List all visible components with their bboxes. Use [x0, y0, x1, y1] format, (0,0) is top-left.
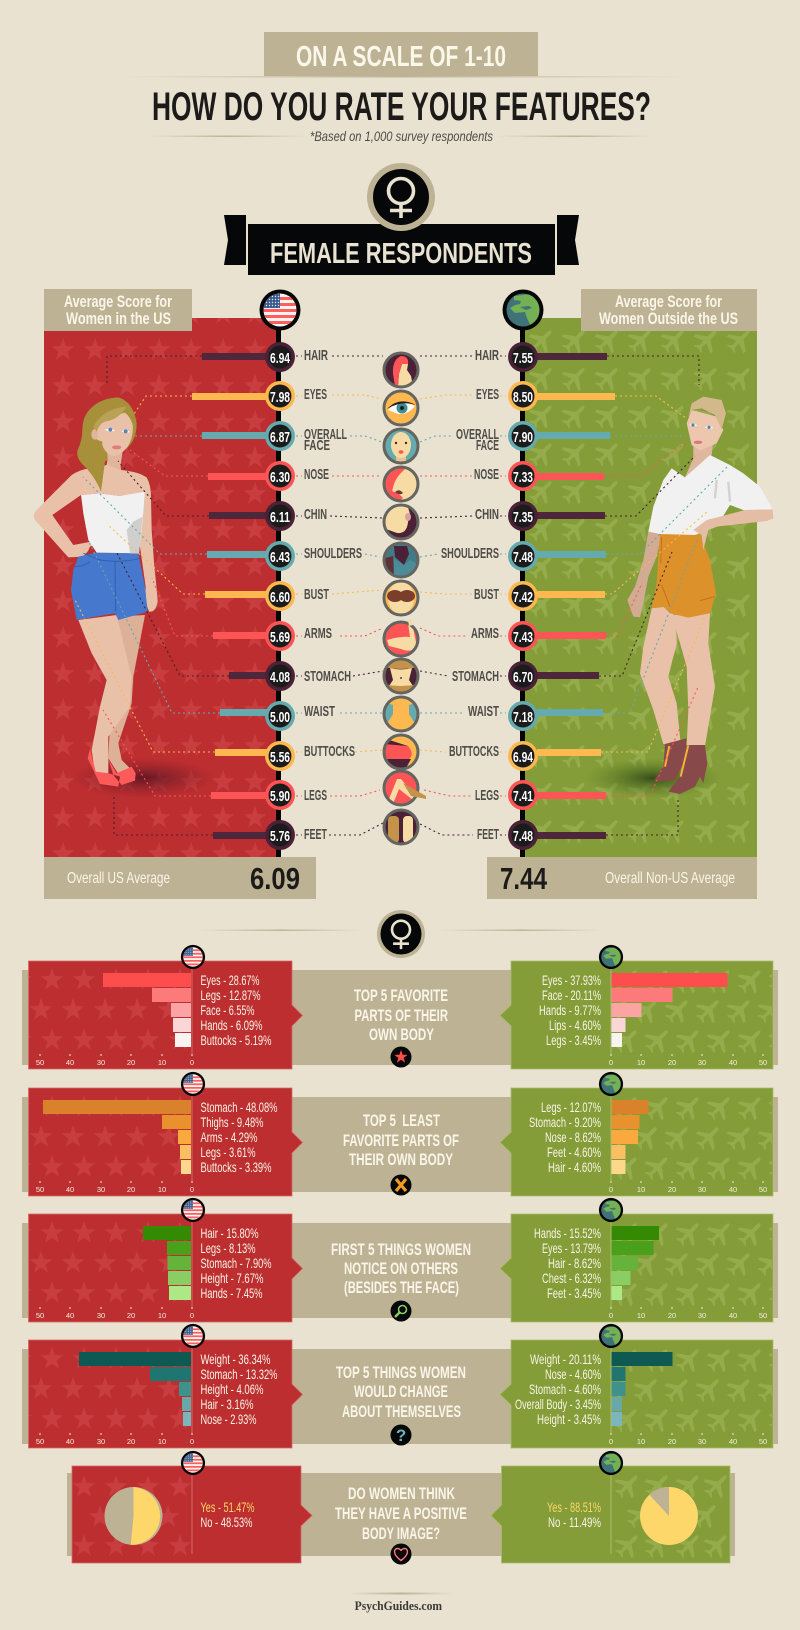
shorts — [652, 534, 716, 618]
panel: US chart: Legs - 8.13% — [200, 1240, 256, 1256]
score badges: US: 6.11 — [270, 509, 290, 526]
row heading: WOULD CHANGE — [354, 1382, 448, 1401]
panel: non-US chart: Legs - 12.07% — [541, 1099, 601, 1115]
panel: non-US chart: Feet - 3.45% — [547, 1285, 601, 1301]
shoes — [88, 749, 136, 787]
hair — [688, 397, 726, 429]
score badges: US: 5.69 — [270, 629, 290, 646]
row heading: THEIR OWN BODY — [349, 1150, 453, 1169]
eyes — [689, 424, 713, 429]
score badges: US: 6.30 — [270, 469, 290, 486]
row heading — [331, 1240, 471, 1297]
score badges: US: 6.94 — [270, 350, 290, 367]
row heading: PARTS OF THEIR — [354, 1006, 448, 1025]
row band — [67, 1473, 735, 1556]
panel: non-US chart — [500, 945, 773, 1069]
panel: non-US pie — [491, 1451, 735, 1563]
panel: non-US pie: Yes - 88.51% — [547, 1499, 601, 1515]
panel: non-US chart: Nose - 8.62% — [545, 1129, 601, 1145]
bars: US scores — [192, 353, 267, 839]
neck — [107, 447, 123, 470]
panel: non-US chart: Height - 3.45% — [537, 1411, 601, 1427]
panel: US chart — [28, 945, 302, 1069]
connector lines: centre — [296, 356, 506, 835]
feature labels: left column — [304, 347, 362, 843]
feature labels: right column: FEET — [477, 826, 499, 843]
icon: magnifier — [390, 1300, 412, 1322]
feature labels: right column: STOMACH — [452, 668, 499, 685]
panel: US chart: 40 — [66, 1185, 74, 1194]
panel: US chart: 20 — [127, 1058, 135, 1067]
panel: US chart: Face - 6.55% — [200, 1002, 254, 1018]
row heading: FAVORITE PARTS OF — [343, 1131, 459, 1150]
banner tails — [224, 215, 579, 265]
feature labels: left column: LEGS — [304, 787, 327, 804]
feature labels: right column: BUST — [474, 586, 499, 603]
panel: non-US chart: 40 — [729, 1185, 737, 1194]
panel: non-US chart: 50 — [759, 1058, 767, 1067]
icon: female divider — [377, 910, 425, 958]
icon: overall face — [383, 428, 419, 464]
score badges: US: 5.00 — [270, 709, 290, 726]
icon: chin — [383, 504, 419, 540]
shadowed back leg — [663, 607, 677, 677]
feature labels: right column: FACE — [476, 437, 499, 454]
row heading — [354, 986, 448, 1044]
score badges: US: 7.98 — [270, 389, 290, 406]
panel: US chart: Buttocks - 5.19% — [200, 1032, 272, 1048]
panel: non-US chart: 30 — [698, 1185, 706, 1194]
panel: US pie: No - 48.53% — [200, 1514, 252, 1530]
row heading: TOP 5 FAVORITE — [354, 986, 448, 1005]
feature labels: right column — [441, 347, 499, 843]
score badges: non-US: 7.43 — [513, 629, 533, 646]
panel: US chart: 30 — [97, 1185, 105, 1194]
panel: non-US chart: 30 — [698, 1437, 706, 1446]
panel: non-US chart: 20 — [668, 1058, 676, 1067]
panel: non-US chart: Face - 20.11% — [542, 987, 601, 1003]
score badges: non-US: 7.90 — [513, 429, 533, 446]
connector lines: US side — [75, 356, 229, 835]
overall US average — [44, 857, 316, 899]
overall US average: Overall US Average — [67, 870, 170, 887]
icon: shoulders — [383, 542, 419, 578]
panel: US chart: Height - 4.06% — [200, 1381, 264, 1397]
row: top 5 least favorite parts — [22, 1072, 778, 1196]
feature labels: right column: LEGS — [475, 787, 499, 804]
panel: non-US chart: 0 — [609, 1437, 613, 1446]
panel: US chart — [28, 1198, 302, 1322]
score badges: non-US: 7.18 — [513, 709, 533, 726]
icon: waist — [383, 696, 419, 732]
panel: US chart: Eyes - 28.67% — [200, 972, 260, 988]
panel: non-US chart: 10 — [637, 1311, 645, 1320]
lips — [112, 445, 121, 449]
panel: US women scores background — [44, 318, 277, 857]
feature labels: left column: STOMACH — [304, 668, 351, 685]
panel: non-US chart: 20 — [668, 1311, 676, 1320]
score badges: non-US: 7.48 — [513, 549, 533, 566]
panel: US chart: 20 — [127, 1185, 135, 1194]
row: top 5 favorite parts — [22, 945, 778, 1069]
left leg — [640, 607, 681, 744]
score badges: US — [267, 344, 293, 848]
panel: US chart: 30 — [97, 1437, 105, 1446]
feature labels: right column: NOSE — [474, 466, 499, 483]
heading: average score US: Average Score for — [64, 292, 172, 311]
panel: US chart: 40 — [66, 1437, 74, 1446]
panel: US chart: Weight - 36.34% — [200, 1351, 270, 1367]
panel: non-US chart — [500, 1072, 773, 1196]
feature labels: right column: ARMS — [471, 625, 499, 642]
score badges: non-US: 6.70 — [513, 669, 533, 686]
panel: US chart: Legs - 12.87% — [200, 987, 260, 1003]
spines — [278, 325, 522, 857]
icon: globe — [502, 290, 544, 330]
panel: US chart: 40 — [66, 1058, 74, 1067]
panel: non-US chart: Hands - 15.52% — [534, 1225, 601, 1241]
panel: US chart: Stomach - 48.08% — [200, 1099, 278, 1115]
icon: legs — [383, 770, 426, 806]
panel: US chart: 50 — [36, 1185, 44, 1194]
overall non-US average: Overall Non-US Average — [605, 870, 735, 887]
panel: US chart: Stomach - 13.32% — [200, 1366, 278, 1382]
panel: non-US chart: 0 — [609, 1185, 613, 1194]
icon: buttocks — [383, 734, 419, 770]
footer: source: PsychGuides.com — [355, 1598, 442, 1613]
panel: non-US women scores background — [525, 318, 757, 857]
panel: US chart: 50 — [36, 1058, 44, 1067]
panel: non-US chart: 10 — [637, 1058, 645, 1067]
feature labels: left column: FEET — [304, 826, 327, 843]
header: scale tag — [264, 32, 538, 76]
heading: average score non-US: Average Score for — [615, 292, 722, 311]
panel: US chart: 0 — [190, 1058, 194, 1067]
pie chart: non-US — [640, 1487, 698, 1545]
panel: US chart: Thighs - 9.48% — [200, 1114, 264, 1130]
panel: US chart: Hands - 6.09% — [200, 1017, 262, 1033]
panel: non-US chart: 50 — [759, 1437, 767, 1446]
panel: non-US chart: 20 — [668, 1185, 676, 1194]
row heading — [343, 1111, 459, 1169]
panel: non-US chart: Legs - 3.45% — [546, 1032, 601, 1048]
eyes — [105, 428, 130, 433]
row heading: FIRST 5 THINGS WOMEN — [331, 1240, 471, 1259]
skin upper body — [34, 455, 158, 612]
shorts folds — [661, 537, 715, 607]
panel: US chart: 0 — [190, 1185, 194, 1194]
panel: non-US chart: 40 — [729, 1058, 737, 1067]
icon: question mark — [390, 1424, 412, 1446]
right leg — [672, 613, 715, 746]
arm right — [693, 509, 773, 550]
panel: non-US chart: Lips - 4.60% — [549, 1017, 601, 1033]
panel: non-US chart: Stomach - 9.20% — [529, 1114, 601, 1130]
panel: non-US chart: 0 — [609, 1311, 613, 1320]
panel: non-US chart: Feet - 4.60% — [547, 1144, 601, 1160]
feature labels: left column: WAIST — [304, 703, 335, 720]
panel: non-US chart: 30 — [698, 1311, 706, 1320]
panel: non-US chart: Hair - 4.60% — [548, 1159, 601, 1175]
feature labels: right column: SHOULDERS — [441, 545, 499, 562]
panel: non-US chart: Overall Body - 3.45% — [515, 1396, 601, 1412]
panel: US chart: 20 — [127, 1437, 135, 1446]
icon: question mark: ? — [396, 1426, 406, 1445]
feature labels: left column: BUTTOCKS — [304, 743, 355, 760]
icon: feet — [383, 809, 419, 845]
subtitle note: *Based on 1,000 survey respondents — [310, 128, 493, 144]
banner text: FEMALE RESPONDENTS — [270, 238, 532, 270]
panel: US chart: Legs - 3.61% — [200, 1144, 256, 1160]
front leg — [78, 615, 132, 773]
zips — [665, 745, 688, 777]
feature labels: left column: EYES — [304, 386, 327, 403]
panel: non-US chart: 40 — [729, 1437, 737, 1446]
panel: non-US chart: 10 — [637, 1185, 645, 1194]
panel: US chart — [28, 1324, 302, 1448]
icon: hair — [383, 352, 419, 388]
panel: US chart: Arms - 4.29% — [200, 1129, 258, 1145]
row heading: ABOUT THEMSELVES — [342, 1402, 461, 1421]
figure: non-US woman — [627, 397, 773, 794]
panel: non-US chart: Chest - 6.32% — [542, 1270, 601, 1286]
feature labels: right column: EYES — [476, 386, 499, 403]
panel: non-US chart — [500, 1198, 773, 1322]
score badges: US: 6.43 — [270, 549, 290, 566]
feature labels: left column: SHOULDERS — [304, 545, 362, 562]
panel: US chart: Hair - 15.80% — [200, 1225, 258, 1241]
score badges: US: 4.08 — [270, 669, 290, 686]
icon: star — [390, 1046, 412, 1068]
bars: non-US scores — [537, 353, 615, 839]
overall US average: 6.09 — [250, 861, 300, 896]
shirt folds — [715, 480, 730, 502]
panel: US chart: 10 — [158, 1311, 166, 1320]
banner body — [248, 224, 555, 275]
panel: non-US chart: Hair - 8.62% — [548, 1255, 601, 1271]
panel: non-US chart: 10 — [637, 1437, 645, 1446]
feature labels: left column: CHIN — [304, 506, 327, 523]
feature labels: left column: OVERALL — [304, 426, 347, 443]
score badges: non-US: 7.55 — [513, 350, 533, 367]
row band — [22, 1349, 778, 1444]
score badges: US: 5.56 — [270, 749, 290, 766]
arm left — [627, 532, 662, 617]
figure: US woman — [34, 397, 158, 787]
score badges: non-US: 7.35 — [513, 509, 533, 526]
panel: US chart: 0 — [190, 1311, 194, 1320]
panel: US chart: 30 — [97, 1058, 105, 1067]
panel: non-US chart: Eyes - 37.93% — [542, 972, 601, 988]
panel: US chart: 10 — [158, 1185, 166, 1194]
panel: non-US chart: Nose - 4.60% — [545, 1366, 601, 1382]
panel: US chart: Hair - 3.16% — [200, 1396, 254, 1412]
feature labels: left column: BUST — [304, 586, 329, 603]
feature labels: left column: NOSE — [304, 466, 329, 483]
row heading: NOTICE ON OTHERS — [344, 1259, 458, 1278]
row heading: OWN BODY — [369, 1025, 434, 1044]
heading: average score non-US — [581, 289, 757, 331]
feature labels: right column: HAIR — [475, 347, 499, 364]
panel: non-US chart: 40 — [729, 1311, 737, 1320]
icon: eye — [383, 390, 419, 426]
icon: arms — [383, 619, 419, 657]
irises — [108, 428, 128, 433]
back leg — [108, 615, 145, 777]
overall non-US average: 7.44 — [500, 861, 548, 896]
score badges: US: 5.90 — [270, 788, 290, 805]
panel: non-US chart: 0 — [609, 1058, 613, 1067]
heading: average score US — [44, 289, 192, 331]
row heading: (BESIDES THE FACE) — [344, 1278, 459, 1297]
feature labels: left column: ARMS — [304, 625, 332, 642]
shorts — [71, 553, 148, 620]
score badges: non-US: 6.94 — [513, 749, 533, 766]
overall non-US average — [487, 857, 757, 899]
row heading — [335, 1484, 467, 1543]
panel: non-US chart: 20 — [668, 1437, 676, 1446]
panel: non-US chart: Weight - 20.11% — [530, 1351, 601, 1367]
row band — [22, 1097, 778, 1192]
panel: non-US chart: 50 — [759, 1311, 767, 1320]
pie chart: US — [104, 1487, 162, 1545]
feature labels: right column: BUTTOCKS — [449, 743, 499, 760]
panel: US chart: 10 — [158, 1058, 166, 1067]
panel: non-US chart: 30 — [698, 1058, 706, 1067]
row heading: THEY HAVE A POSITIVE — [335, 1504, 467, 1523]
face — [93, 413, 133, 456]
feature labels: right column: CHIN — [475, 506, 499, 523]
panel: US chart: 10 — [158, 1437, 166, 1446]
row band — [22, 970, 778, 1065]
feature labels: right column: OVERALL — [456, 426, 499, 443]
panel: non-US chart: Hands - 9.77% — [539, 1002, 601, 1018]
score badges: non-US: 7.42 — [513, 589, 533, 606]
heading: average score non-US: Women Outside the US — [599, 309, 738, 328]
panel: US pie: Yes - 51.47% — [200, 1499, 254, 1515]
panel: non-US chart — [500, 1324, 773, 1448]
score badges: US: 5.76 — [270, 828, 290, 845]
panel: US pie — [72, 1451, 312, 1563]
score badges: non-US: 7.33 — [513, 469, 533, 486]
icon: nose — [383, 466, 419, 502]
neck — [685, 440, 713, 477]
icon: heart — [390, 1544, 412, 1564]
row heading: BODY IMAGE? — [362, 1524, 440, 1543]
feature labels: left column: HAIR — [304, 347, 328, 364]
row: positive body image — [67, 1451, 735, 1564]
row band — [22, 1223, 778, 1318]
panel: US chart: 40 — [66, 1311, 74, 1320]
panel: US chart: Stomach - 7.90% — [200, 1255, 272, 1271]
connector lines: non-US side — [599, 356, 727, 835]
panel: US chart: 50 — [36, 1437, 44, 1446]
panel: US chart: Nose - 2.93% — [200, 1411, 256, 1427]
panel: US chart: Buttocks - 3.39% — [200, 1159, 272, 1175]
shirt — [648, 455, 773, 535]
row: top 5 things women would change — [22, 1324, 778, 1448]
score badges: US: 6.60 — [270, 589, 290, 606]
feature labels: left column: FACE — [304, 437, 330, 454]
icon: stomach — [383, 658, 419, 694]
panel: non-US chart: 50 — [759, 1185, 767, 1194]
feature labels: right column: WAIST — [468, 703, 499, 720]
hair — [77, 397, 137, 492]
panel: US chart: Height - 7.67% — [200, 1270, 264, 1286]
score badges: non-US: 7.41 — [513, 788, 533, 805]
score badges: US: 6.87 — [270, 429, 290, 446]
irises — [691, 423, 711, 429]
panel: US chart: 30 — [97, 1311, 105, 1320]
panel: US chart: 20 — [127, 1311, 135, 1320]
head — [687, 410, 723, 451]
row heading: TOP 5 LEAST — [363, 1111, 440, 1130]
heading: average score US: Women in the US — [66, 309, 171, 328]
score badges: non-US — [510, 344, 536, 848]
row: first 5 things women notice — [22, 1198, 778, 1322]
shorts details — [75, 553, 140, 612]
ear — [91, 429, 98, 440]
top shade — [127, 517, 143, 553]
panel: US chart: Hands - 7.45% — [200, 1285, 262, 1301]
score badges: non-US: 7.48 — [513, 828, 533, 845]
panel: US chart: 50 — [36, 1311, 44, 1320]
header: scale tag: ON A SCALE OF 1-10 — [296, 41, 506, 73]
panel: US chart: 0 — [190, 1437, 194, 1446]
panel: non-US pie: No - 11.49% — [548, 1514, 601, 1530]
lips — [694, 441, 702, 444]
score badges: non-US: 8.50 — [513, 389, 533, 406]
female icon badge — [367, 163, 435, 231]
boots — [653, 738, 707, 794]
icon: cross — [390, 1174, 412, 1196]
panel: non-US chart: Eyes - 13.79% — [542, 1240, 601, 1256]
row heading — [336, 1363, 466, 1421]
panel: non-US chart: Stomach - 4.60% — [529, 1381, 601, 1397]
top — [81, 492, 145, 553]
row heading: DO WOMEN THINK — [348, 1484, 455, 1503]
banner: female respondents — [224, 163, 579, 275]
icon: US flag — [260, 290, 300, 330]
panel: US chart — [28, 1072, 302, 1196]
row heading: TOP 5 THINGS WOMEN — [336, 1363, 466, 1382]
hair highlight — [93, 407, 127, 432]
icon: bust — [383, 580, 419, 616]
